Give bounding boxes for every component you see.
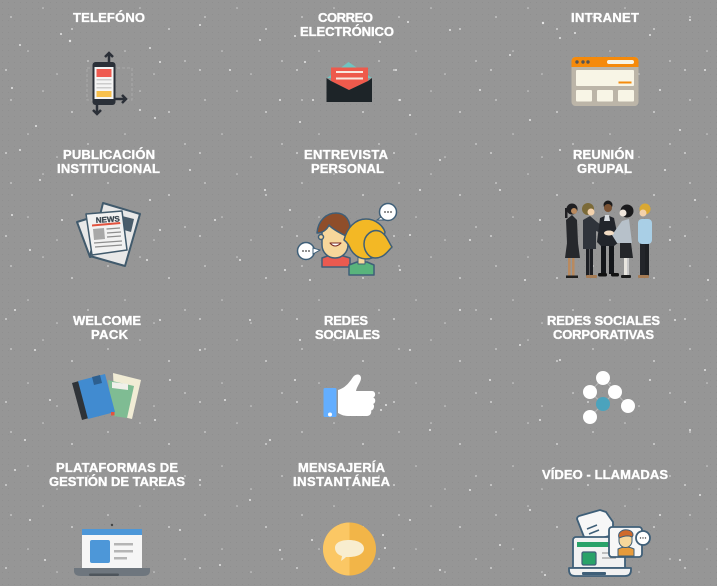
person 5 xyxy=(638,204,652,278)
handshake xyxy=(604,230,614,236)
heading: teléfono: TELEFÓNO xyxy=(73,10,145,25)
icon: chat circle xyxy=(323,522,376,576)
heading: correo electrónico: CORREO xyxy=(318,10,373,25)
icon: browser window xyxy=(572,57,638,106)
heading: publicación institucional: INSTITUCIONAL xyxy=(57,161,160,176)
panel: reunión grupal xyxy=(565,147,652,278)
heading: entrevista personal: PERSONAL xyxy=(311,161,384,176)
icon: laptop with video call xyxy=(569,510,650,576)
heading: mensajería instantánea: MENSAJERÍA xyxy=(298,460,386,475)
heading: entrevista personal: ENTREVISTA xyxy=(304,147,389,162)
panel: mensajería instantánea xyxy=(293,460,391,576)
heading: reunión grupal: REUNIÓN xyxy=(573,147,634,162)
heading: correo electrónico: ELECTRÓNICO xyxy=(300,24,394,39)
icon: speech bubble left xyxy=(298,242,320,260)
panel: vídeo-llamadas xyxy=(542,467,668,576)
panel: entrevista personal xyxy=(298,147,396,275)
icon: phone with arrows xyxy=(87,53,132,114)
heading: welcome pack: WELCOME xyxy=(73,313,141,328)
panel: publicación institucional: NEWS xyxy=(96,214,121,225)
heading: plataformas de gestión de tareas: GESTIÓN DE TAREAS xyxy=(49,474,185,489)
icon: notebooks xyxy=(72,373,141,420)
icon: envelope with letter xyxy=(326,62,372,102)
icon: speech bubble right xyxy=(377,204,396,220)
icon: two people talking xyxy=(317,213,392,275)
woman with headset xyxy=(317,213,350,267)
panel: redes sociales xyxy=(315,313,380,417)
panel: correo electrónico xyxy=(300,10,394,102)
heading: mensajería instantánea: INSTANTÁNEA xyxy=(293,474,391,489)
heading: redes sociales: SOCIALES xyxy=(315,327,380,342)
icon: newspapers xyxy=(77,203,140,266)
person 3 xyxy=(597,200,619,276)
icon: group of people xyxy=(565,200,652,278)
panel: plataformas de gestión de tareas xyxy=(49,460,185,576)
heading: vídeo-llamadas: VÍDEO - LLAMADAS xyxy=(542,467,668,482)
panel: intranet xyxy=(571,10,639,106)
blonde woman from behind xyxy=(344,219,392,275)
heading: publicación institucional: PUBLICACIÓN xyxy=(63,147,155,162)
icon: network nodes xyxy=(583,371,635,424)
heading: reunión grupal: GRUPAL xyxy=(577,161,632,176)
heading: plataformas de gestión de tareas: PLATAFORMAS DE xyxy=(56,460,178,475)
panel: teléfono xyxy=(73,10,145,114)
panel: publicación institucional xyxy=(57,147,160,266)
panel: welcome pack xyxy=(72,313,141,420)
heading: welcome pack: PACK xyxy=(91,327,129,342)
person 4 xyxy=(612,204,634,278)
icon: thumbs up xyxy=(324,374,375,417)
heading: redes sociales corporativas: REDES SOCIALES xyxy=(547,313,660,328)
person 2 xyxy=(582,203,608,278)
panel: redes sociales corporativas xyxy=(547,313,660,424)
heading: redes sociales corporativas: CORPORATIVAS xyxy=(553,327,654,342)
heading: intranet: INTRANET xyxy=(571,10,639,25)
heading: redes sociales: REDES xyxy=(324,313,368,328)
icon: laptop with task window xyxy=(74,524,150,576)
person 1 xyxy=(565,204,580,278)
